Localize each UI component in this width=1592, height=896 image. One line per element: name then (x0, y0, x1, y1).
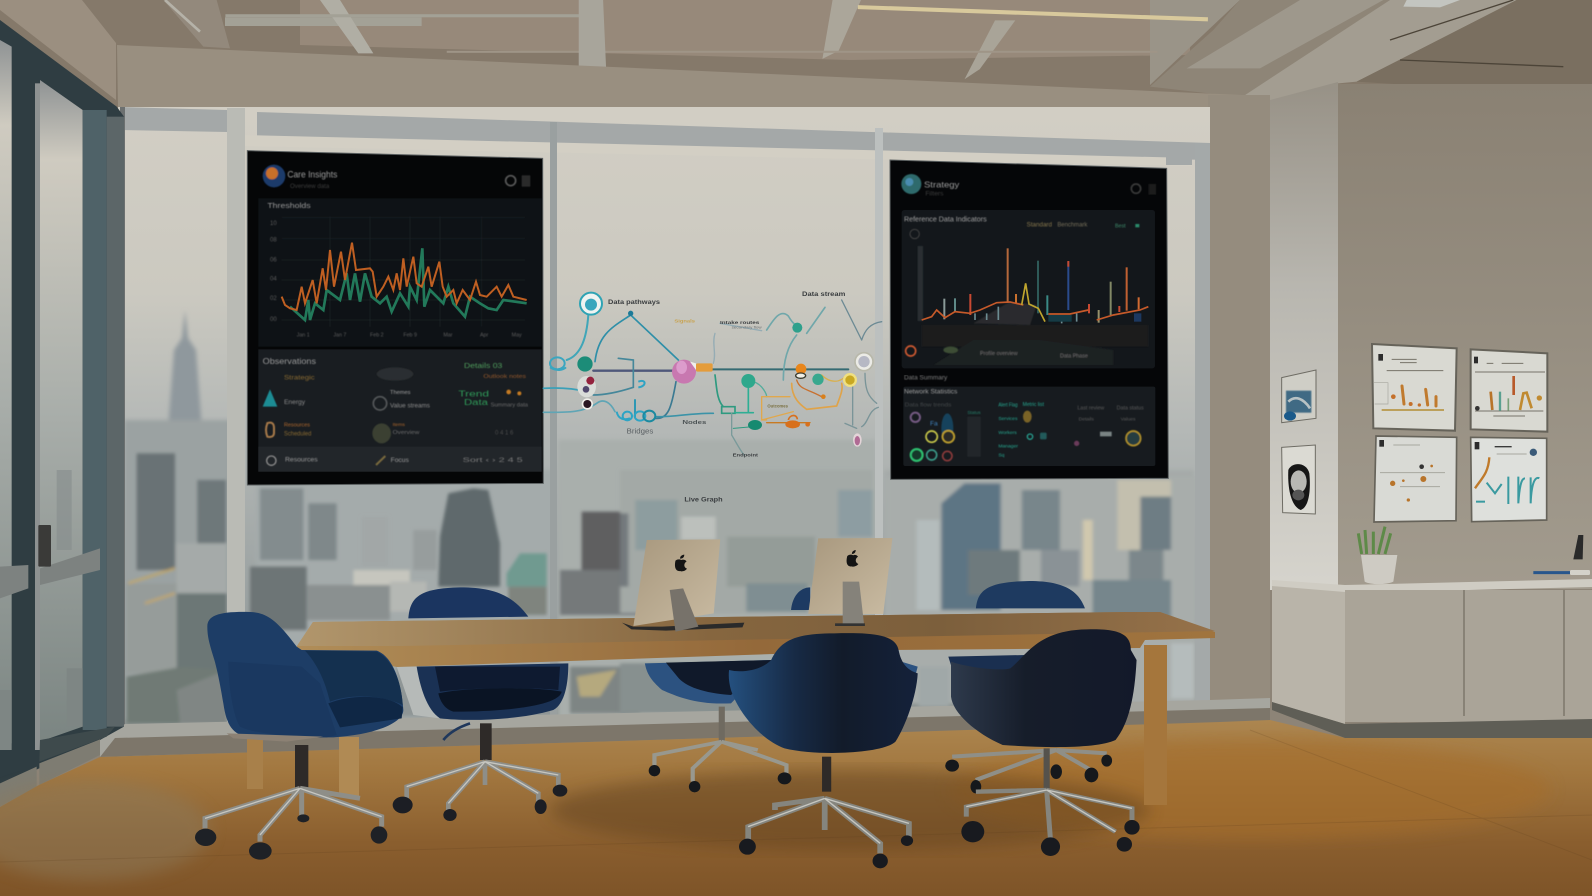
glass door at left (0, 20, 124, 807)
flow labels: Data pathways (608, 299, 660, 306)
lower indicators panel: Manager (998, 443, 1018, 449)
flow diagram on the window (543, 292, 882, 503)
flow labels: Nodes (682, 420, 706, 426)
ceiling (0, 0, 1592, 123)
door handle (38, 525, 51, 567)
node: green circle (577, 356, 593, 372)
left upper wall (0, 0, 116, 100)
node: coloured pair (577, 376, 596, 397)
table legs (247, 645, 1167, 805)
lower summary panel: Strategic (284, 375, 315, 381)
window sill and baseboard (100, 698, 1270, 757)
bar chart panel: Reference Data Indicators (904, 214, 987, 223)
lower summary panel: Scheduled (284, 431, 311, 437)
lower indicators panel: Sq (998, 453, 1005, 459)
desk items (1533, 535, 1590, 575)
bar chart panel: Standard (1027, 223, 1052, 229)
line chart panel: 08 (270, 238, 277, 244)
bar chart panel: Profile overview (980, 351, 1018, 357)
framed picture: black form (1282, 445, 1315, 514)
line chart panel (258, 198, 542, 347)
trend lines (922, 283, 1148, 323)
panel: right dashboard (890, 160, 1168, 479)
node: teal ellipse bottom (748, 420, 762, 430)
lower summary panel: Trend (458, 389, 489, 399)
node: orange cluster (785, 415, 810, 428)
lower indicators panel: Alert Flag (998, 403, 1018, 409)
lower summary panel: Resources (285, 456, 318, 463)
icon: apple logo (847, 550, 858, 567)
lower summary panel: Themes (390, 390, 411, 396)
node: pink hub (672, 360, 696, 384)
lower indicators panel: Data flow trends (905, 403, 952, 409)
window shade bands (120, 107, 1210, 166)
chair behind table centre (645, 587, 918, 792)
chair front right (951, 629, 1140, 856)
node: orange dot pair (796, 364, 806, 378)
computer right (808, 538, 892, 626)
lower summary panel: Energy (284, 399, 306, 406)
wall art and charts (1282, 344, 1590, 584)
orange data line (282, 243, 527, 310)
dashboard header: Strategy (924, 179, 960, 189)
bar chart panel (902, 210, 1155, 368)
dashboard header: Filters (925, 190, 944, 197)
window mullions (120, 107, 1210, 728)
lower indicators panel: Services (998, 416, 1018, 422)
icon: apple logo (675, 555, 687, 571)
bar chart panel: Data Phase (1060, 353, 1088, 359)
line chart panel: Feb 9 (403, 333, 417, 339)
poster: teal lines (1471, 437, 1547, 522)
lower indicators panel: Network Statistics (904, 388, 958, 395)
lower summary panel: Value streams (390, 402, 430, 409)
lower indicators panel: Status (967, 410, 981, 415)
green data line (290, 248, 527, 320)
section label: Data Summary (904, 375, 947, 381)
poster: orange bar chart (1372, 344, 1457, 431)
lower indicators panel: Workers (998, 430, 1017, 436)
node: small blue dot (628, 311, 633, 316)
chair front left (195, 612, 403, 860)
line chart panel: 02 (270, 296, 277, 302)
lower summary panel: Resources (284, 423, 310, 429)
lower indicators panel: Details (1079, 417, 1094, 423)
lower summary panel: Observations (263, 357, 316, 366)
line chart panel: 04 (270, 277, 277, 283)
poster: scatter plot (1374, 436, 1457, 522)
lower indicators panel: Metric list (1023, 402, 1044, 408)
door glass pane centre (40, 80, 83, 742)
flow labels: secondary flow (732, 325, 762, 330)
lower summary panel (258, 349, 542, 472)
node: grey ring (855, 353, 873, 371)
lower summary panel: Focus (391, 457, 409, 464)
line chart panel: Thresholds (267, 201, 311, 210)
dashboard header: Overview data (290, 183, 330, 190)
lower indicators panel: Fa (930, 420, 938, 427)
chair front centre (729, 633, 918, 868)
lower summary panel: Summary data (491, 403, 528, 409)
node: orange tag (696, 363, 713, 372)
lower summary panel: Items (393, 422, 405, 428)
line chart panel: 10 (270, 221, 277, 227)
node: teal circle centre right (812, 374, 824, 385)
window with city view (100, 107, 1270, 757)
framed picture: blue abstract (1282, 370, 1316, 423)
panel: left dashboard (247, 151, 543, 485)
chair second from left (393, 587, 568, 821)
computer left (622, 539, 744, 632)
node: teal circle top right (792, 323, 802, 333)
chair behind table right (945, 581, 1112, 793)
node: dark circle (582, 398, 593, 410)
line chart panel: Apr (480, 333, 489, 339)
city skyline (124, 310, 1196, 723)
line chart panel: 06 (270, 258, 277, 264)
line chart panel: May (512, 333, 522, 339)
node: teal script cluster (617, 381, 655, 421)
line chart panel: 00 (270, 317, 277, 323)
line chart panel: Mar (443, 333, 453, 339)
conference table (297, 612, 1215, 667)
lower summary panel: 0 4 1 6 (495, 431, 514, 437)
bar chart panel: Best (1115, 223, 1126, 229)
dashboard header (263, 165, 530, 190)
flow labels: Endpoint (733, 453, 758, 459)
flow labels: Signals (674, 319, 695, 325)
lower summary panel: Sort ‹ › 2 4 5 (463, 457, 523, 464)
flow labels: Intake routes (720, 320, 760, 326)
flow labels: Outcomes (767, 403, 789, 408)
lower summary panel: Overview (393, 430, 420, 436)
node: orange dash (821, 394, 826, 399)
upper header wall (117, 45, 1268, 142)
lower indicators panel (903, 387, 1155, 466)
flow labels: Bridges (627, 428, 654, 435)
lower summary panel: Details 03 (464, 361, 502, 370)
dashboard header: Care Insights (287, 169, 338, 179)
node: pink drop (853, 433, 862, 447)
flow labels: Data stream (802, 292, 845, 298)
lower indicators panel: Values (1121, 417, 1136, 423)
lower indicators panel: Last review (1077, 405, 1104, 411)
node: teal circle lower (741, 374, 755, 388)
flow labels: Live Graph (684, 496, 723, 503)
connector lines (543, 300, 882, 455)
vertical bars (944, 248, 1139, 323)
lower summary panel: Outlook notes (483, 374, 526, 380)
node: top left ring (580, 293, 602, 315)
flow labels (608, 292, 845, 503)
right cabinet (1272, 579, 1592, 738)
poster: multicolour bars (1471, 349, 1547, 432)
node: yellow ring (843, 373, 857, 387)
lower indicators panel: Data status (1117, 405, 1144, 411)
wooden floor (0, 720, 1592, 896)
right wall and column (1208, 82, 1592, 735)
node: left glyph (550, 357, 566, 370)
line chart panel: Jan 1 (297, 333, 310, 339)
plant in white pot (1358, 527, 1397, 584)
line chart panel: Jan 7 (333, 333, 346, 339)
line chart panel: Feb 2 (370, 333, 384, 339)
bar chart panel: Benchmark (1057, 223, 1087, 229)
dashboard header (901, 174, 1156, 197)
lower summary panel: Data (464, 398, 489, 407)
door glass pane left (0, 40, 12, 750)
